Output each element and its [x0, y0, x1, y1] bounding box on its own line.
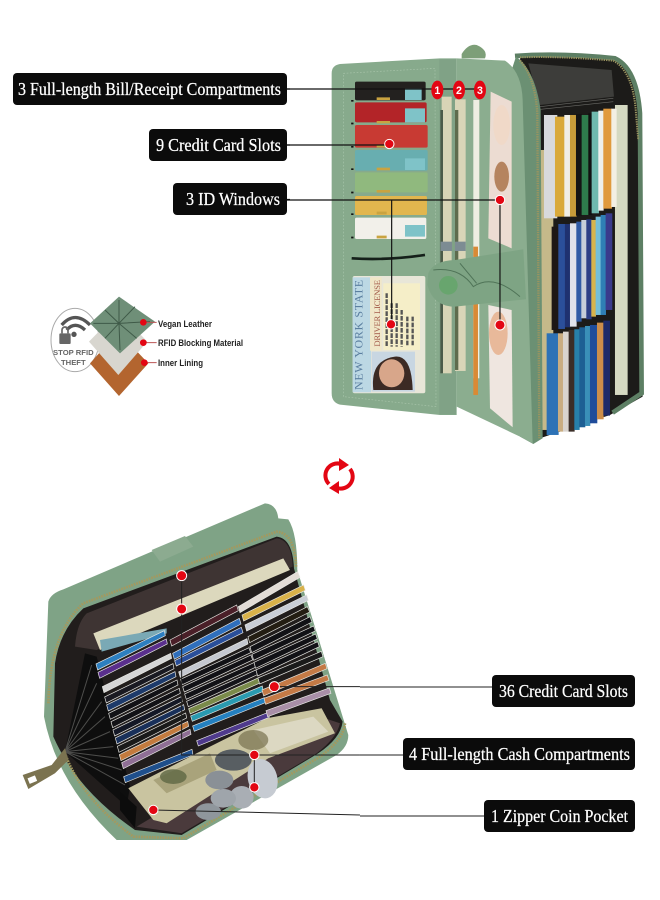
long slot — [352, 255, 425, 259]
label: bill compartments — [13, 73, 287, 105]
outer zipper edge — [515, 55, 642, 413]
back pocket bills — [93, 558, 290, 650]
pocket corner — [120, 792, 137, 828]
pointer stubs to top labels — [287, 89, 290, 200]
lining — [53, 537, 343, 835]
banknotes — [128, 708, 335, 823]
back lining — [75, 538, 293, 650]
label: nine card slots — [149, 129, 287, 161]
card column one — [96, 631, 193, 783]
accordion folds — [540, 98, 613, 109]
ID window with licence: NEW YORK STATE — [352, 280, 366, 390]
layer labels: RFID Blocking Material — [158, 338, 243, 349]
strap — [152, 536, 193, 562]
stop RFID badge: STOP RFID — [53, 348, 94, 357]
inner lining layer — [90, 332, 148, 396]
label: ID windows: 3 ID Windows — [186, 189, 280, 209]
stop RFID badge: THEFT — [61, 358, 86, 367]
outer green shell — [44, 503, 348, 840]
wallet interior — [520, 57, 643, 438]
label: cash compartments — [403, 738, 635, 770]
number marker 3: 3 — [477, 85, 483, 97]
card column three — [238, 572, 331, 717]
vegan leather layer — [90, 297, 155, 353]
snap strap — [427, 249, 526, 307]
top zipper pull — [462, 45, 486, 58]
label: thirty-six card slots: 36 Credit Card Slots — [499, 681, 628, 701]
ID window with licence: DRIVER LICENSE — [372, 280, 382, 347]
number marker 3 — [474, 81, 486, 99]
pointer lines — [287, 89, 500, 325]
ID window with licence — [352, 276, 425, 393]
RFID blocking layer — [89, 312, 147, 375]
label: cash compartments: 4 Full-length Cash Compartments — [409, 744, 630, 764]
snap button — [439, 276, 458, 295]
long receipt at back — [615, 105, 628, 395]
spine strip — [439, 59, 456, 414]
layer labels — [158, 319, 243, 369]
spine zipper and gusset — [512, 57, 543, 444]
panel stitching — [343, 68, 436, 407]
open accordion wallet — [23, 503, 360, 840]
label: coin pocket — [484, 800, 635, 832]
number marker 1 — [431, 81, 443, 99]
flap ID windows — [488, 92, 513, 427]
card slots — [352, 82, 428, 239]
layer labels: Inner Lining — [158, 358, 203, 369]
card column two — [170, 605, 269, 746]
icon: flip arrows — [325, 458, 353, 494]
bottom lining — [137, 717, 340, 833]
number marker 2: 2 — [456, 85, 462, 97]
pointer dots — [385, 139, 505, 330]
zipper rim — [48, 532, 345, 838]
inner dark pocket — [528, 63, 614, 105]
label: bill compartments: 3 Full-length Bill/Receipt Compartments — [18, 79, 281, 99]
inner flap — [457, 58, 533, 443]
label: coin pocket: 1 Zipper Coin Pocket — [491, 806, 628, 826]
coins — [196, 749, 282, 820]
number marker 2 — [453, 81, 465, 99]
left panel — [332, 58, 457, 415]
label: ID windows — [173, 183, 287, 215]
accordion fan — [65, 653, 130, 807]
open wallet with nine card slots — [287, 45, 643, 444]
stop RFID badge — [51, 308, 99, 372]
three bill compartments — [440, 97, 479, 395]
pointer lines — [153, 576, 360, 815]
layer labels: Vegan Leather — [158, 319, 212, 330]
layer pointers — [140, 319, 157, 366]
pointer line to labels — [360, 687, 492, 816]
pointer dots — [149, 571, 279, 815]
number marker 1: 1 — [434, 85, 440, 97]
zipper pull — [23, 748, 68, 789]
card stack — [540, 109, 617, 435]
label: nine card slots: 9 Credit Card Slots — [156, 135, 281, 155]
RFID blocking layers diagram — [51, 297, 157, 396]
label: thirty-six card slots — [492, 675, 635, 707]
